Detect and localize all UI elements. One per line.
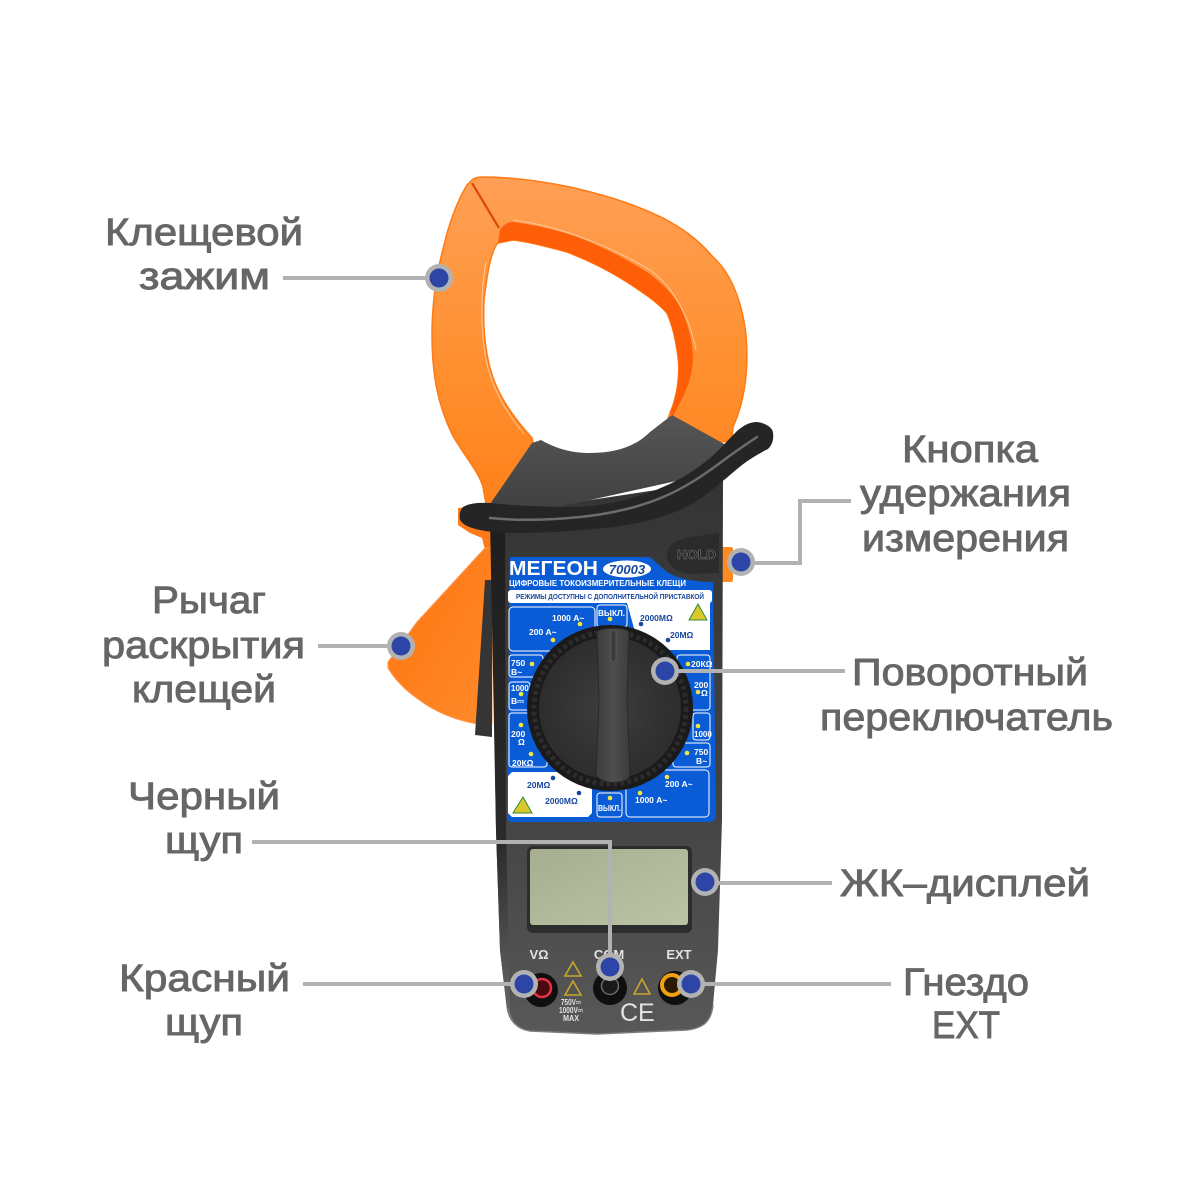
label: black probe: Черный <box>128 776 280 818</box>
blue panel <box>507 557 716 822</box>
marker: clamp <box>425 264 453 292</box>
warning icon bottom <box>513 797 532 813</box>
socket labels <box>529 947 692 962</box>
marker: red <box>510 970 538 998</box>
voltage rating: 750V⎓ <box>561 997 582 1007</box>
scale labels: 2000МΩ <box>640 613 673 623</box>
marker: ext <box>677 970 705 998</box>
marker: dial <box>651 657 679 685</box>
label: rotary switch <box>820 652 1113 739</box>
lever black strip <box>475 580 492 737</box>
ext socket <box>658 971 692 1005</box>
hold button <box>667 533 719 574</box>
label: hold button: удержания <box>860 473 1071 515</box>
white zone bottom left <box>508 772 592 817</box>
label: lever: клещей <box>132 669 276 711</box>
voltage rating: 1000V⎓ <box>559 1005 584 1015</box>
label: ext socket <box>903 962 1029 1047</box>
label: ext socket: EXT <box>932 1005 1000 1047</box>
scale labels: Ω <box>701 688 708 698</box>
scale labels: 2000МΩ <box>545 796 578 806</box>
label: red probe <box>119 958 290 1044</box>
clamp head <box>488 415 726 520</box>
scale labels: 20МΩ <box>527 780 551 790</box>
ce mark: C <box>620 999 638 1027</box>
label: black probe: щуп <box>165 820 243 862</box>
head bar <box>460 422 773 533</box>
ce mark <box>620 999 655 1027</box>
label: hold button: измерения <box>862 518 1069 560</box>
rotary dial <box>527 625 693 791</box>
label: hold button <box>860 429 1071 560</box>
label: ext socket: Гнездо <box>903 962 1029 1004</box>
scale labels: В~ <box>511 667 522 677</box>
scale labels <box>511 609 713 813</box>
strip text: РЕЖИМЫ ДОСТУПНЫ С ДОПОЛНИТЕЛЬНОЙ ПРИСТАВКОЙ <box>516 592 704 601</box>
scale labels: 750 <box>511 658 525 668</box>
label: rotary switch: переключатель <box>820 697 1113 739</box>
label: clamp jaw <box>105 212 303 298</box>
label: lever <box>102 580 305 711</box>
scale labels: В~ <box>696 756 707 766</box>
scale labels: 20КΩ <box>512 758 534 768</box>
warning icon top <box>689 604 707 620</box>
scale labels: 20КΩ <box>691 659 713 669</box>
jaw split line <box>472 183 499 228</box>
white zone top right <box>627 603 710 650</box>
voltage rating: MAX <box>563 1013 579 1023</box>
label: red probe: щуп <box>165 1002 243 1044</box>
jaw inner band <box>498 222 693 416</box>
label: lever: раскрытия <box>102 625 305 667</box>
scale labels: 200 <box>694 680 708 690</box>
scale labels: 1000 А~ <box>552 613 584 623</box>
label: clamp jaw: зажим <box>139 256 270 298</box>
socket labels: EXT <box>666 947 692 962</box>
dial pointer <box>596 628 630 782</box>
outlined zones <box>509 605 710 817</box>
label: black probe <box>128 776 280 862</box>
clamp jaw <box>432 177 747 515</box>
label: red probe: Красный <box>119 958 290 1000</box>
scale labels: 1000 <box>511 684 529 693</box>
release lever <box>388 548 492 737</box>
marker: lcd <box>691 868 719 896</box>
scale labels: 200 А~ <box>665 779 693 789</box>
label: hold button: Кнопка <box>902 429 1039 471</box>
multimeter device <box>388 177 773 1034</box>
warning triangles <box>565 962 650 995</box>
lcd display <box>527 846 692 933</box>
socket labels: VΩ <box>529 947 549 962</box>
jaw rim highlight <box>482 220 696 434</box>
leader lines <box>252 278 891 984</box>
socket labels: COM <box>594 947 624 962</box>
meter body <box>491 480 723 1034</box>
hold button: HOLD <box>677 547 716 562</box>
scale labels: 1000 А~ <box>635 795 667 805</box>
label: clamp jaw: Клещевой <box>105 212 303 254</box>
black socket <box>593 971 627 1005</box>
model badge: 70003 <box>609 562 646 577</box>
voltage rating <box>559 997 584 1023</box>
brand name: МЕГЕОН <box>509 558 598 580</box>
marker: com <box>596 953 624 981</box>
scale labels: ВЫКЛ. <box>598 804 621 813</box>
scale labels: В⎓ <box>511 696 525 706</box>
marker: hold <box>727 548 755 576</box>
model badge <box>603 560 651 578</box>
label: lcd: ЖК–дисплей <box>840 863 1090 905</box>
scale labels: ВЫКЛ. <box>598 609 625 618</box>
white strip <box>508 590 712 603</box>
red socket <box>524 973 558 1007</box>
pointer slot <box>611 630 616 662</box>
label: lever: Рычаг <box>152 580 266 622</box>
scale labels: 750 <box>694 747 708 757</box>
body back orange tabs <box>458 505 733 582</box>
scale labels: 200 <box>511 729 525 739</box>
ce mark: E <box>638 999 655 1027</box>
scale labels: 1000 <box>694 730 712 739</box>
marker: lever <box>387 632 415 660</box>
label: rotary switch: Поворотный <box>852 652 1088 694</box>
panel subtitle: ЦИФРОВЫЕ ТОКОИЗМЕРИТЕЛЬНЫЕ КЛЕЩИ <box>509 579 686 588</box>
scale labels: 200 А~ <box>529 627 557 637</box>
scale labels: 20МΩ <box>670 630 694 640</box>
scale labels: Ω <box>518 737 525 747</box>
left body edge <box>490 520 510 1015</box>
bottom rim <box>508 1005 713 1034</box>
scale dots <box>519 617 700 800</box>
